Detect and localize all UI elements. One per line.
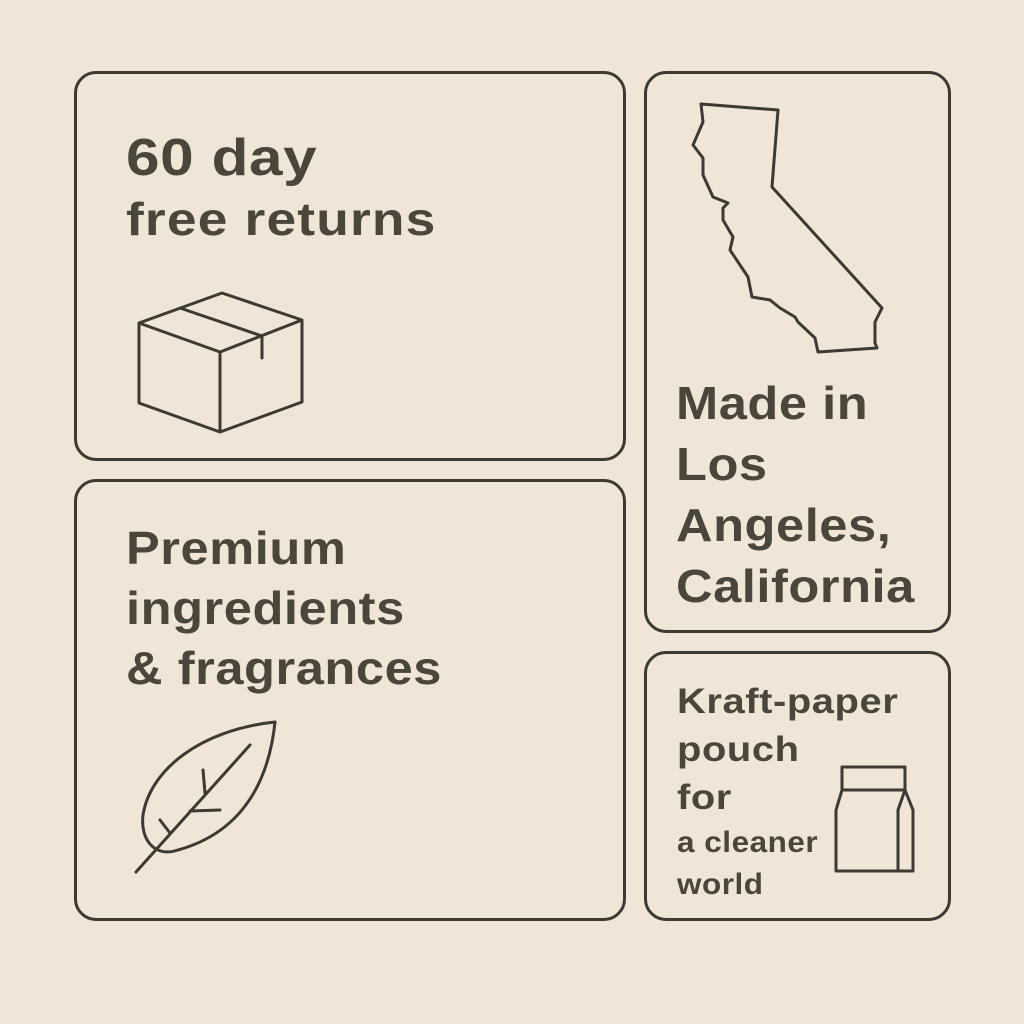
heading: 60 day free returns: free returns [126, 193, 436, 245]
panel: returns [74, 71, 626, 461]
heading: premium ingredients [126, 522, 442, 694]
panel: kraft pouch [644, 651, 951, 921]
icon: box [139, 293, 302, 432]
text: kraft pouch: a cleaner [677, 826, 818, 859]
heading: 60 day free returns [126, 129, 436, 245]
panel: premium [74, 479, 626, 921]
text: kraft pouch: world [677, 868, 764, 901]
text: kraft pouch: pouch [677, 730, 800, 769]
heading: made in LA: Made in [676, 377, 868, 429]
heading: made in LA [676, 377, 915, 612]
icon: leaf [136, 722, 275, 872]
heading: 60 day free returns: 60 day [126, 129, 317, 187]
heading: made in LA: Angeles, [676, 499, 891, 551]
panel: made in LA [644, 71, 951, 633]
icon: pouch [836, 767, 913, 871]
heading: made in LA: California [676, 560, 915, 612]
heading: premium ingredients: ingredients [126, 582, 405, 634]
text: kraft pouch: for [677, 778, 732, 817]
heading: made in LA: Los [676, 438, 768, 490]
heading: premium ingredients: Premium [126, 522, 346, 574]
text: kraft pouch [676, 682, 898, 901]
icon: california [693, 104, 882, 352]
text: kraft pouch: Kraft-paper [677, 682, 898, 721]
heading: premium ingredients: & fragrances [126, 642, 442, 694]
